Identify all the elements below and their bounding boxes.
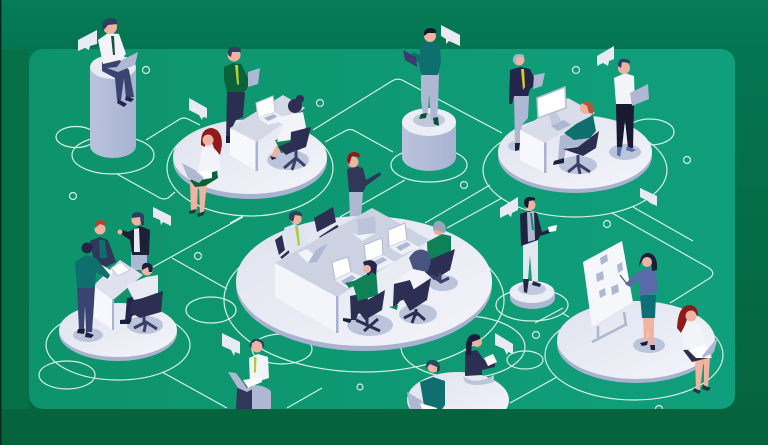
- speech bubble: bottom left: [153, 207, 171, 226]
- person: man in navy jacket on pedestal: [520, 197, 557, 293]
- speech bubble: top right: [597, 46, 614, 66]
- platform: top right: [498, 115, 652, 193]
- platform: bottom left: [59, 303, 177, 361]
- person: seated man in green, far side: [425, 221, 458, 291]
- person: seated woman at desk: [267, 95, 311, 170]
- person: seated man at bottom left desk: [120, 263, 163, 334]
- speech bubble: standing man: [500, 197, 518, 218]
- speech bubble: right: [640, 188, 657, 206]
- person: seated woman with long hair: [389, 250, 437, 324]
- speech bubble: above platform: [189, 98, 207, 120]
- person: standing man in green: [224, 47, 260, 143]
- panel: [29, 49, 735, 409]
- speech bubble: bottom center: [495, 333, 513, 355]
- cylinder: top center: [402, 108, 456, 171]
- network lines: [39, 66, 723, 412]
- person: woman with headset holding paper: [463, 334, 497, 385]
- laptops: center desk: [298, 216, 419, 288]
- desk: center: [275, 208, 430, 333]
- person: presenter woman: [620, 253, 665, 353]
- person: grey-haired man with tablet: [508, 54, 545, 151]
- person: man on cylinder with laptop: [98, 18, 138, 107]
- desk: bottom left: [94, 260, 143, 330]
- speech bubble: bottom left stool: [222, 333, 240, 356]
- laptop: top left desk: [256, 96, 287, 125]
- person: seated man in teal: [553, 102, 599, 174]
- pedestal: small right: [510, 281, 555, 309]
- person: red-haired woman with laptop: [182, 128, 222, 217]
- speech bubble: top center: [441, 25, 460, 46]
- whiteboard: [583, 241, 633, 342]
- person: man in black jacket: [118, 212, 150, 270]
- cylinder: top left: [90, 55, 136, 158]
- person: red-haired man: [90, 220, 116, 270]
- platform: bottom right: [557, 301, 715, 383]
- platform: top left: [173, 120, 327, 199]
- person: standing man with laptop, right: [609, 59, 649, 160]
- desk: top right: [520, 98, 595, 173]
- person: red-haired woman with laptop, right: [677, 305, 718, 394]
- speech bubble: top left: [78, 30, 97, 51]
- person: man in teal at bottom: [407, 360, 445, 412]
- desk: top left: [230, 95, 305, 171]
- clipped bottom figures: [228, 338, 509, 409]
- person: man at left end of center desk: [275, 211, 311, 258]
- person: man in teal, back view: [73, 242, 110, 342]
- person: standing woman behind center desk: [347, 152, 381, 220]
- person: seated woman in green: [343, 260, 393, 336]
- platform: center: [236, 216, 492, 351]
- person: standing man in teal with tablet: [403, 28, 441, 126]
- monitor: [537, 87, 571, 131]
- chair: back of center desk: [314, 207, 338, 238]
- person: headset man on stool: [228, 340, 271, 409]
- platform: bottom center: [407, 372, 509, 409]
